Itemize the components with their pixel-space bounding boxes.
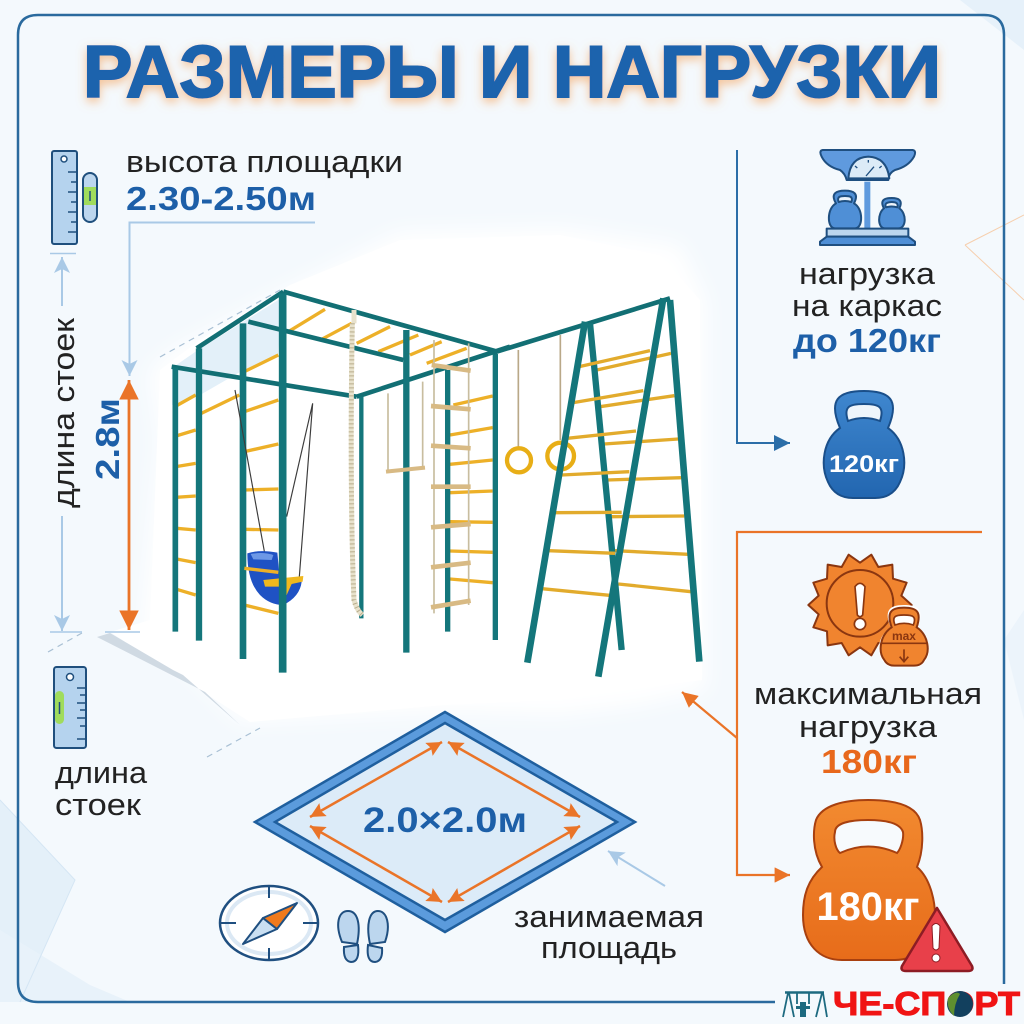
icon: max load warning badge: max [892,629,916,643]
label: occupied area: занимаемая [514,899,704,934]
white photo backdrop [140,228,706,722]
label: frame load [792,256,942,359]
pale shadow under frame [97,633,240,725]
icon: orange kettlebell 180 kg [803,800,935,960]
orange dimension arrows [310,742,580,902]
label: maximum load: 180кг [821,743,917,780]
swing ropes [235,390,313,577]
trapeze [386,382,425,472]
front post [271,293,294,673]
icon: warning triangle [902,908,972,971]
icon: max load warning badge [808,555,929,667]
right A-frame [493,298,699,677]
A-frame back rungs and beam [493,298,699,662]
label: maximum load: максимальная [754,676,982,711]
label: platform height [126,144,403,217]
baby swing seat [244,551,303,605]
icon: ruler with level, lower left [54,667,86,748]
label: post length [55,755,148,822]
icon: blue kettlebell 120 kg [824,391,904,498]
arrow: post length, bottom [61,516,63,631]
white photo backdrop core [110,235,702,722]
posts [175,323,495,659]
arrow: platform height leader [130,222,315,376]
gymnastic rings [507,335,574,472]
arrow: orange line to 180 kg [737,532,982,875]
knotted rope [351,310,362,615]
label: post length: длина [55,755,148,790]
icon: orange kettlebell 180 kg: 180кг [816,885,920,929]
playground illustration [172,292,699,677]
label: 2.8 m vertical: 2.8м [89,398,126,480]
A-frame front legs [527,298,663,677]
pale blue glass behind frame corner [172,297,283,405]
icon: scales with kettlebells [820,150,915,245]
label: frame load: нагрузка [799,256,936,291]
left structure [172,292,510,673]
label: occupied area: площадь [541,930,677,965]
logo: Che-Sport: ЧЕ-СПОРТ [833,985,1020,1022]
label: frame load: на каркас [792,288,942,323]
icon: compass [220,886,318,960]
title: РАЗМЕРЫ И НАГРУЗКИ [83,32,941,113]
icon: blue kettlebell 120 kg: 120кг [829,451,899,478]
rope ladder [431,340,471,613]
arrow: to diamond [608,851,665,886]
label: post length vertical: длина стоек [46,318,81,508]
top beams [172,292,510,397]
arrow: orange height dimension [128,380,130,630]
diagram: occupied area diamond [255,712,635,932]
dashed outline marks around the backdrop [48,290,280,757]
label: platform height: 2.30-2.50м [126,180,316,217]
arrow: orange line to frame [682,692,737,738]
area value: 2.0×2.0м [363,801,527,840]
label: frame load: до 120кг [793,322,941,359]
arrow: post length, top [61,257,63,306]
icon: ruler with level, top left [52,151,97,244]
label: platform height: высота площадки [126,144,403,179]
label: maximum load: нагрузка [799,709,938,744]
label: maximum load [754,676,982,780]
arrow: blue line to 120 kg [737,150,790,443]
yellow rungs [176,309,493,613]
icon: footprints [338,911,388,962]
label: occupied area [514,899,704,965]
label: post length: стоек [55,787,141,822]
